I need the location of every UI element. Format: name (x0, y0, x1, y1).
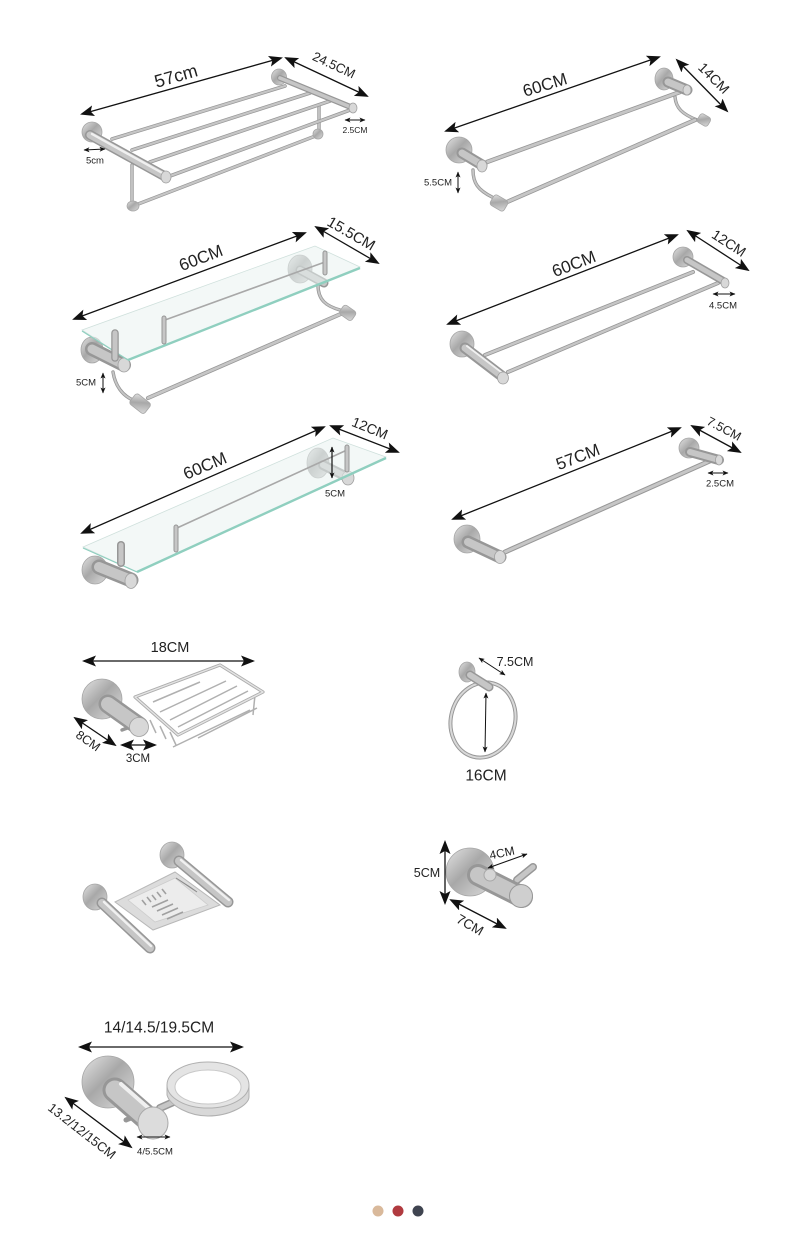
dimension: 60CM (82, 427, 324, 533)
dimension: 14/14.5/19.5CM: 14/14.5/19.5CM (104, 1020, 214, 1036)
product: glass shelf 60CM (82, 414, 398, 588)
dimension: 7.5CM (692, 414, 744, 452)
product: tumbler holder (45, 1020, 249, 1162)
dimension: 3CM: 3CM (126, 753, 150, 765)
dimension: 5cm (84, 149, 105, 166)
product: double towel bar 60CM (448, 226, 749, 384)
icon: glass shelf (81, 246, 360, 415)
dimension: 60CM (74, 233, 305, 319)
dimension: 5CM: 5CM (76, 378, 96, 388)
icon: towel ring (442, 662, 524, 765)
dimension: 7.5CM: 7.5CM (704, 414, 744, 444)
dimension: 7CM: 7CM (454, 911, 486, 939)
product: double towel rail 60CM (424, 57, 733, 212)
dimension: 5CM: 5CM (325, 488, 345, 500)
icon: tumbler holder (82, 1056, 249, 1139)
dimension: 4/5.5CM: 4/5.5CM (137, 1146, 173, 1158)
dimension: 5.5CM (424, 172, 458, 193)
dimension: 18CM: 18CM (151, 640, 189, 656)
dimension: 8CM: 8CM (73, 728, 103, 754)
dimension: 12CM (688, 226, 749, 270)
dimension: 4.5CM: 4.5CM (709, 300, 737, 312)
dimension: 60CM (448, 235, 677, 324)
icon: robe hook (446, 848, 533, 908)
dimension: 60CM: 60CM (549, 247, 599, 281)
dimension: 14CM (677, 59, 733, 111)
icon: glass shelf (82, 438, 386, 588)
product: towel ring 16CM (442, 655, 533, 784)
dimension: 5.5CM: 5.5CM (424, 178, 452, 188)
dimension: 12CM: 12CM (709, 226, 749, 260)
product: single towel bar 57CM (453, 414, 744, 564)
icon: single bar (454, 438, 722, 564)
dimension: 4/5.5CM (137, 1137, 173, 1158)
dimension: 12CM (331, 414, 398, 452)
dimension: 8CM (73, 718, 115, 754)
dimension: 57CM: 57CM (553, 440, 603, 474)
dimension: 24.5CM: 24.5CM (310, 49, 358, 81)
dimension: 57cm (82, 58, 281, 114)
dimension: 2.5CM: 2.5CM (706, 478, 734, 490)
product: double robe hook (414, 842, 533, 939)
dimension: 3CM (122, 745, 155, 765)
dimension: 57cm: 57cm (152, 60, 200, 92)
dimension: 5CM (76, 373, 103, 393)
product: wire soap basket 18CM (73, 640, 263, 765)
dimension: 60CM: 60CM (521, 69, 569, 101)
dimension: 2.5CM (706, 473, 734, 490)
product: glass shelf with towel bar 60CM (74, 214, 378, 415)
icon: double bar (450, 247, 729, 384)
dimension: 5CM: 5CM (414, 866, 440, 880)
dimension: 60CM: 60CM (180, 448, 230, 484)
dimension: 12CM: 12CM (350, 414, 390, 442)
dimension: 16CM: 16CM (465, 768, 507, 784)
dimension: 13.2/12/15CM: 13.2/12/15CM (45, 1100, 119, 1162)
dimension: 15.5CM: 15.5CM (324, 214, 378, 254)
dimension: 60CM: 60CM (176, 241, 226, 275)
dimension: 5cm: 5cm (86, 156, 104, 166)
dimension: 2.5CM (342, 120, 368, 135)
dimension: 14CM: 14CM (695, 59, 733, 97)
product: soap dish holder (83, 842, 229, 948)
icon: soap dish (83, 842, 229, 948)
dimension: 57CM (453, 428, 680, 519)
icon: soap basket (82, 665, 263, 747)
dimension: 60CM (446, 57, 659, 131)
colour swatches (372, 1206, 424, 1216)
dimension: 2.5CM: 2.5CM (342, 125, 368, 135)
dimension: 5CM (325, 447, 345, 500)
icon: towel rack (82, 69, 357, 211)
icon: double rail with hanger (446, 68, 712, 212)
dimension: 24.5CM (286, 49, 367, 96)
product: folding towel rack 57cm (82, 49, 368, 211)
dimension: 7.5CM: 7.5CM (497, 655, 533, 669)
dimension: 4CM: 4CM (488, 844, 516, 862)
dimension: 4.5CM (709, 294, 737, 312)
